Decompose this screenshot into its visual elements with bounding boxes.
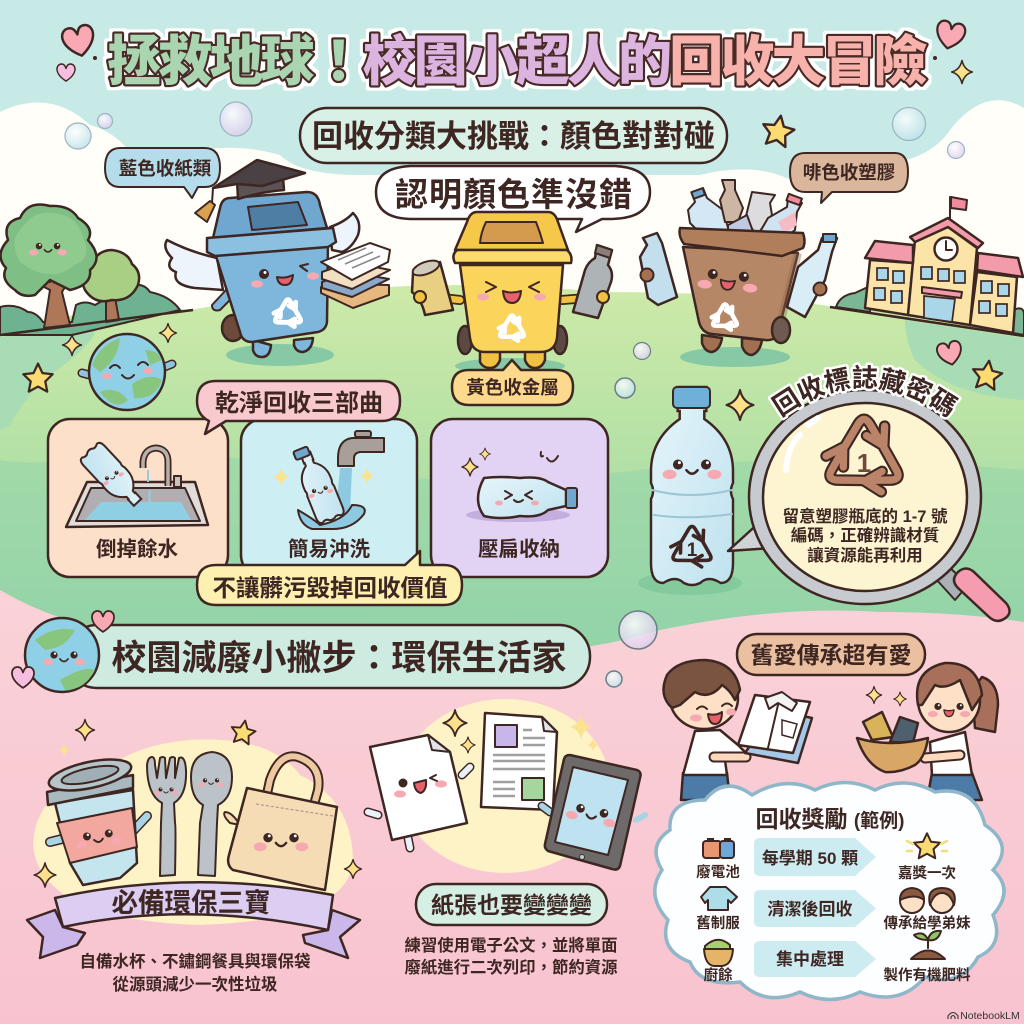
input labels: [696, 863, 740, 984]
happy paper: [368, 735, 470, 848]
recycling code icon: [820, 419, 907, 495]
output labels: 傳承給學弟妹: [884, 914, 971, 932]
magnifier text: 編碼，正確辨識材質: [791, 526, 939, 545]
folded shirt: [738, 692, 812, 763]
label: yellow metal: 黃色收金屬: [466, 377, 559, 398]
output labels: 製作有機肥料: [884, 966, 971, 984]
blue bin face: [251, 264, 319, 288]
spoon: [191, 752, 232, 876]
clouds band: [0, 100, 1024, 360]
plastic bottle character: 1: [687, 540, 698, 561]
heading: clean recycling trilogy: 乾淨回收三部曲: [215, 390, 383, 417]
green meadow: [0, 285, 1024, 660]
panel: flatten: [431, 419, 608, 577]
bubbles and stars in sky: [65, 102, 964, 158]
sink illustration: [66, 440, 208, 527]
heading pill: 紙張也要變變變: [431, 892, 592, 918]
magnifier curved title: 回收標誌藏密碼: [768, 362, 962, 420]
title decorations: [57, 19, 972, 83]
yellow blob: [400, 699, 610, 873]
reward arrows: [754, 838, 876, 977]
crushed can: [411, 258, 453, 315]
magnifying glass: 1: [857, 448, 871, 478]
input labels: 廚餘: [704, 966, 733, 984]
cloud panel: recycling rewards: [655, 782, 1004, 1000]
darker green hill: [0, 440, 1024, 660]
brown bin character: [640, 180, 837, 367]
description: 廢紙進行二次列印，節約資源: [404, 958, 618, 977]
tablet: [542, 755, 645, 870]
bottles in bin: [688, 180, 802, 240]
tree left: [0, 204, 193, 335]
panel: paper transforms: [368, 699, 645, 977]
speech bubble: remember colours: 認明顏色準沒錯: [395, 176, 633, 213]
heading: pass on love: 舊愛傳承超有愛: [750, 642, 912, 668]
callout: dirt ruins value: [197, 551, 462, 605]
sparkles: [443, 710, 598, 753]
blue bin character: [165, 160, 390, 366]
meadow patch left: [0, 323, 95, 430]
icon: children: [900, 888, 955, 913]
ribbon banner: [27, 882, 360, 958]
arrow labels: [762, 849, 858, 969]
basket: [857, 686, 928, 772]
icon: uniform: [701, 887, 737, 910]
metal bottle: [573, 245, 612, 318]
label: blue paper: [105, 148, 220, 198]
magnifier text: 讓資源能再利用: [807, 545, 923, 565]
input labels: 舊制服: [696, 914, 740, 932]
description: [404, 936, 618, 977]
panel: pour out water: [48, 419, 228, 577]
callout: dirt ruins value: 不讓髒污毀掉回收價值: [212, 574, 448, 601]
girl with basket: [857, 663, 998, 800]
panel: rinse: [241, 419, 417, 577]
yellow blob: [33, 739, 353, 925]
magnifying glass: [728, 390, 1010, 621]
description: 從源頭減少一次性垃圾: [112, 974, 278, 994]
heading: clean recycling trilogy: [197, 381, 400, 434]
bottle right: [787, 234, 837, 317]
arrow labels: 清潔後回收: [768, 900, 852, 919]
heading: pass on love: [737, 634, 925, 675]
wings: [165, 213, 359, 290]
magnifier text: [782, 506, 948, 565]
fork: [147, 757, 186, 876]
document: [481, 713, 557, 810]
bubbles near heading: [606, 611, 657, 687]
paper stack: [321, 243, 390, 308]
bottle left: [640, 233, 677, 305]
arrow labels: 每學期 50 顆: [762, 849, 858, 868]
icon: star: [907, 833, 947, 858]
description: [80, 951, 311, 994]
heading: campus waste reduction: 校園減廢小撇步：環保生活家: [111, 639, 567, 678]
label: 簡易沖洗: [288, 537, 370, 561]
heading: sorting challenge: 回收分類大挑戰：顏色對對碰: [312, 119, 715, 154]
watermark: NotebookLM: [960, 1010, 1020, 1022]
tote bag: [224, 756, 337, 890]
speech bubble: remember colours: [376, 166, 650, 232]
label: 倒掉餘水: [96, 537, 178, 561]
icon: battery: [703, 838, 734, 858]
label: brown plastic: 啡色收塑膠: [803, 162, 895, 183]
panel: three eco treasures: [27, 718, 362, 994]
output labels: 嘉獎一次: [898, 864, 956, 882]
sparkles: [34, 718, 362, 887]
cup: [46, 754, 147, 885]
graduation cap: [195, 160, 305, 222]
cloud title: 回收獎勵 (範例): [755, 806, 905, 832]
label: blue paper: 藍色收紙類: [119, 158, 212, 179]
arrow labels: 集中處理: [776, 949, 844, 969]
yellow bin character: [411, 212, 612, 374]
plastic bottle character: [638, 387, 742, 595]
boy with shirt: [663, 660, 812, 800]
meadow patch right: [905, 320, 1024, 400]
description: 練習使用電子公文，並將單面: [404, 936, 618, 955]
heading: campus waste reduction: [66, 625, 590, 688]
earth icon: [12, 611, 114, 692]
meadow stars: [23, 324, 1004, 420]
label: 壓扁收納: [478, 538, 560, 561]
flatten illustration: [462, 448, 577, 522]
input labels: 廢電池: [696, 863, 740, 881]
label: brown plastic: [790, 153, 908, 203]
pink lower section: [0, 590, 1024, 1024]
heading pill: [416, 884, 607, 925]
icon: food waste basket: [704, 940, 733, 966]
yellow bin face: [477, 282, 546, 303]
rinse illustration: [273, 431, 384, 529]
school building: [830, 197, 1024, 336]
heading: sorting challenge: [300, 108, 727, 163]
ribbon banner: 必備環保三寶: [112, 888, 270, 918]
label: yellow metal: [452, 360, 573, 405]
output labels: [884, 864, 971, 984]
description: 自備水杯、不鏽鋼餐具與環保袋: [80, 951, 311, 971]
title: 拯救地球！校園小超人的回收大冒險: [107, 32, 927, 92]
icon: sprout: [911, 931, 945, 959]
small earth character: [82, 334, 172, 410]
magnifier text: 留意塑膠瓶底的 1-7 號: [782, 506, 948, 526]
